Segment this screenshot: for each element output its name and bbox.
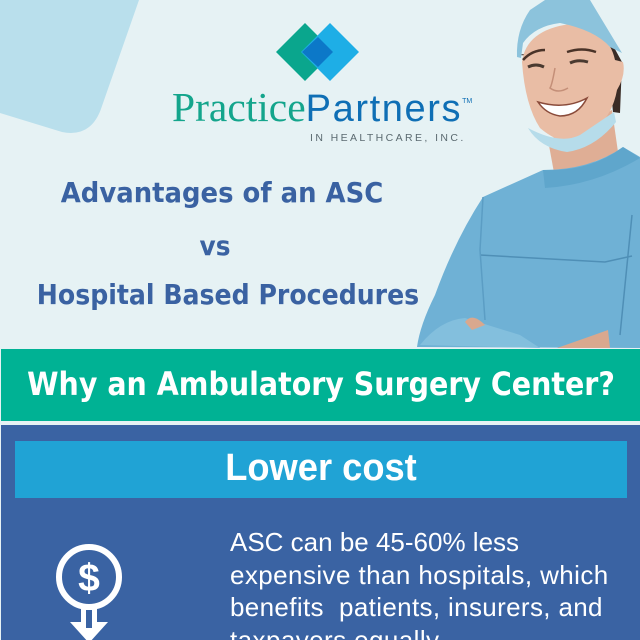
logo [172, 23, 472, 144]
icon: dollar with down arrow [56, 544, 122, 640]
decorative corner shape [0, 0, 139, 133]
logo wordmark: PracticePartnersTM [172, 84, 472, 130]
title [37, 176, 419, 311]
logo mark: overlapping diamonds [276, 23, 359, 81]
banner heading: Why an Ambulatory Surgery Center? [27, 365, 615, 403]
panel body text [230, 527, 609, 640]
logo tagline: IN HEALTHCARE, INC. [310, 132, 466, 144]
title line 1: Advantages of an ASC [61, 176, 383, 209]
panel heading bar [15, 441, 627, 498]
panel body text: benefits patients, insurers, and [230, 592, 603, 622]
illustration: smiling surgeon [417, 0, 640, 348]
title line 2: vs [200, 231, 230, 262]
panel body text: expensive than hospitals, which [230, 560, 609, 590]
panel: lower cost [1, 425, 640, 640]
icon: dollar with down arrow: $ [78, 557, 100, 600]
title line 3: Hospital Based Procedures [37, 278, 419, 311]
panel heading: Lower cost [225, 447, 417, 489]
panel body text: ASC can be 45-60% less [230, 527, 519, 557]
banner: why an ASC [1, 349, 640, 421]
